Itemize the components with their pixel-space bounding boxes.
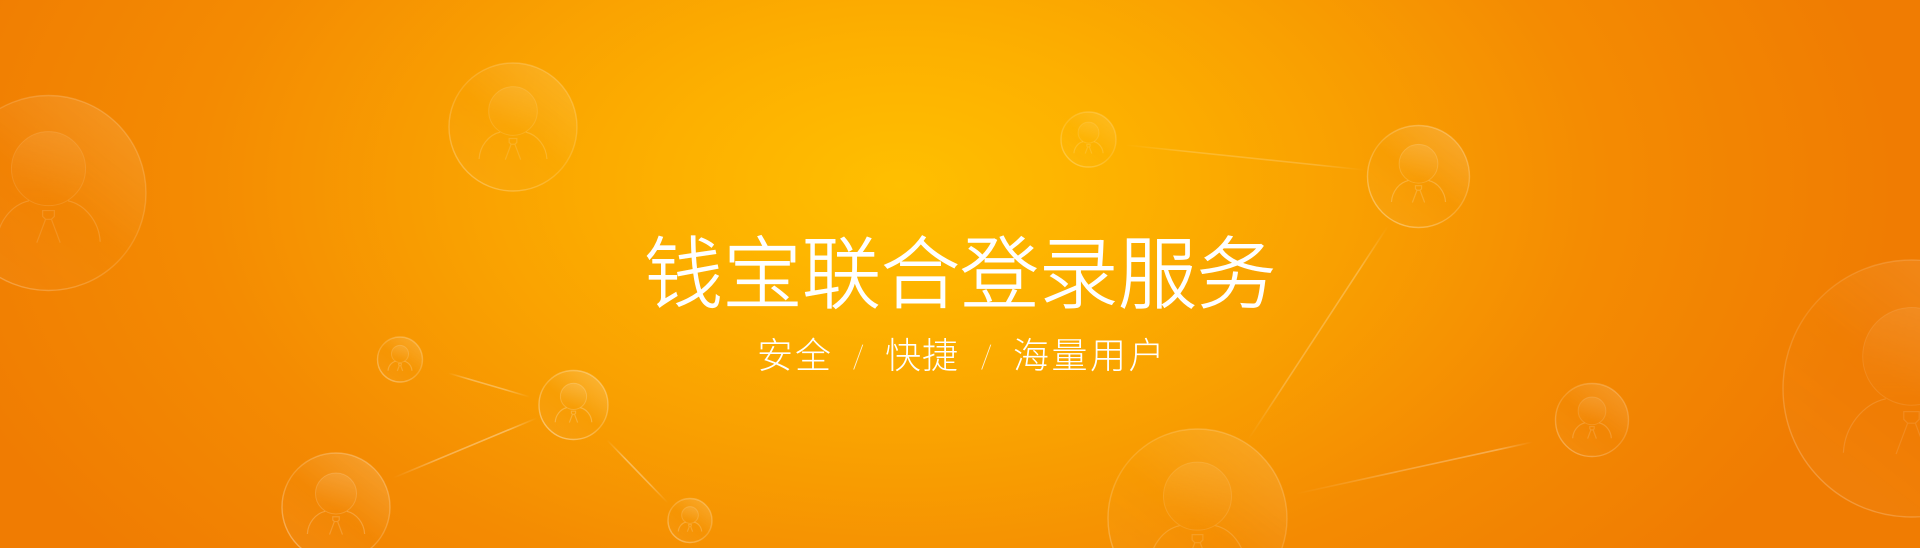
- subtitle: 海量用户: [1013, 335, 1167, 376]
- subtitle: [757, 335, 1167, 376]
- subtitle: /: [981, 336, 992, 373]
- icon: user bubble, bottom left: [282, 453, 390, 548]
- subtitle: 安全: [757, 335, 833, 376]
- title: 钱宝联合登录服务: [644, 230, 1276, 319]
- connection line: bottom large bubble to lower-right bubble: [1295, 442, 1533, 494]
- subtitle: 快捷: [885, 335, 959, 376]
- connection line: right bubble to bottom large bubble: [1248, 226, 1388, 440]
- icon: user bubble, lower left centre: [539, 370, 608, 440]
- connection line: top-left small bubble to centre bubble: [448, 373, 530, 397]
- icon: user bubble, upper right: [1368, 126, 1470, 228]
- icon: user bubble, far left large: [0, 96, 146, 290]
- icon: user bubble, far right large: [1783, 260, 1920, 517]
- connection line: top small bubble to right bubble: [1125, 145, 1365, 170]
- icon: user bubble, lower left small: [378, 337, 422, 382]
- subtitle: /: [853, 336, 864, 373]
- icon: user bubble, bottom centre large: [1108, 429, 1287, 548]
- connection line: centre bubble to bottom small bubble: [607, 440, 668, 503]
- connection line: lower-left bubble to centre bubble: [393, 418, 537, 478]
- icon: user bubble, top centre small: [1061, 112, 1116, 167]
- icon: user bubble, bottom small: [668, 498, 712, 542]
- icon: user bubble, lower right: [1556, 384, 1628, 456]
- icon: user bubble, upper left: [449, 63, 577, 191]
